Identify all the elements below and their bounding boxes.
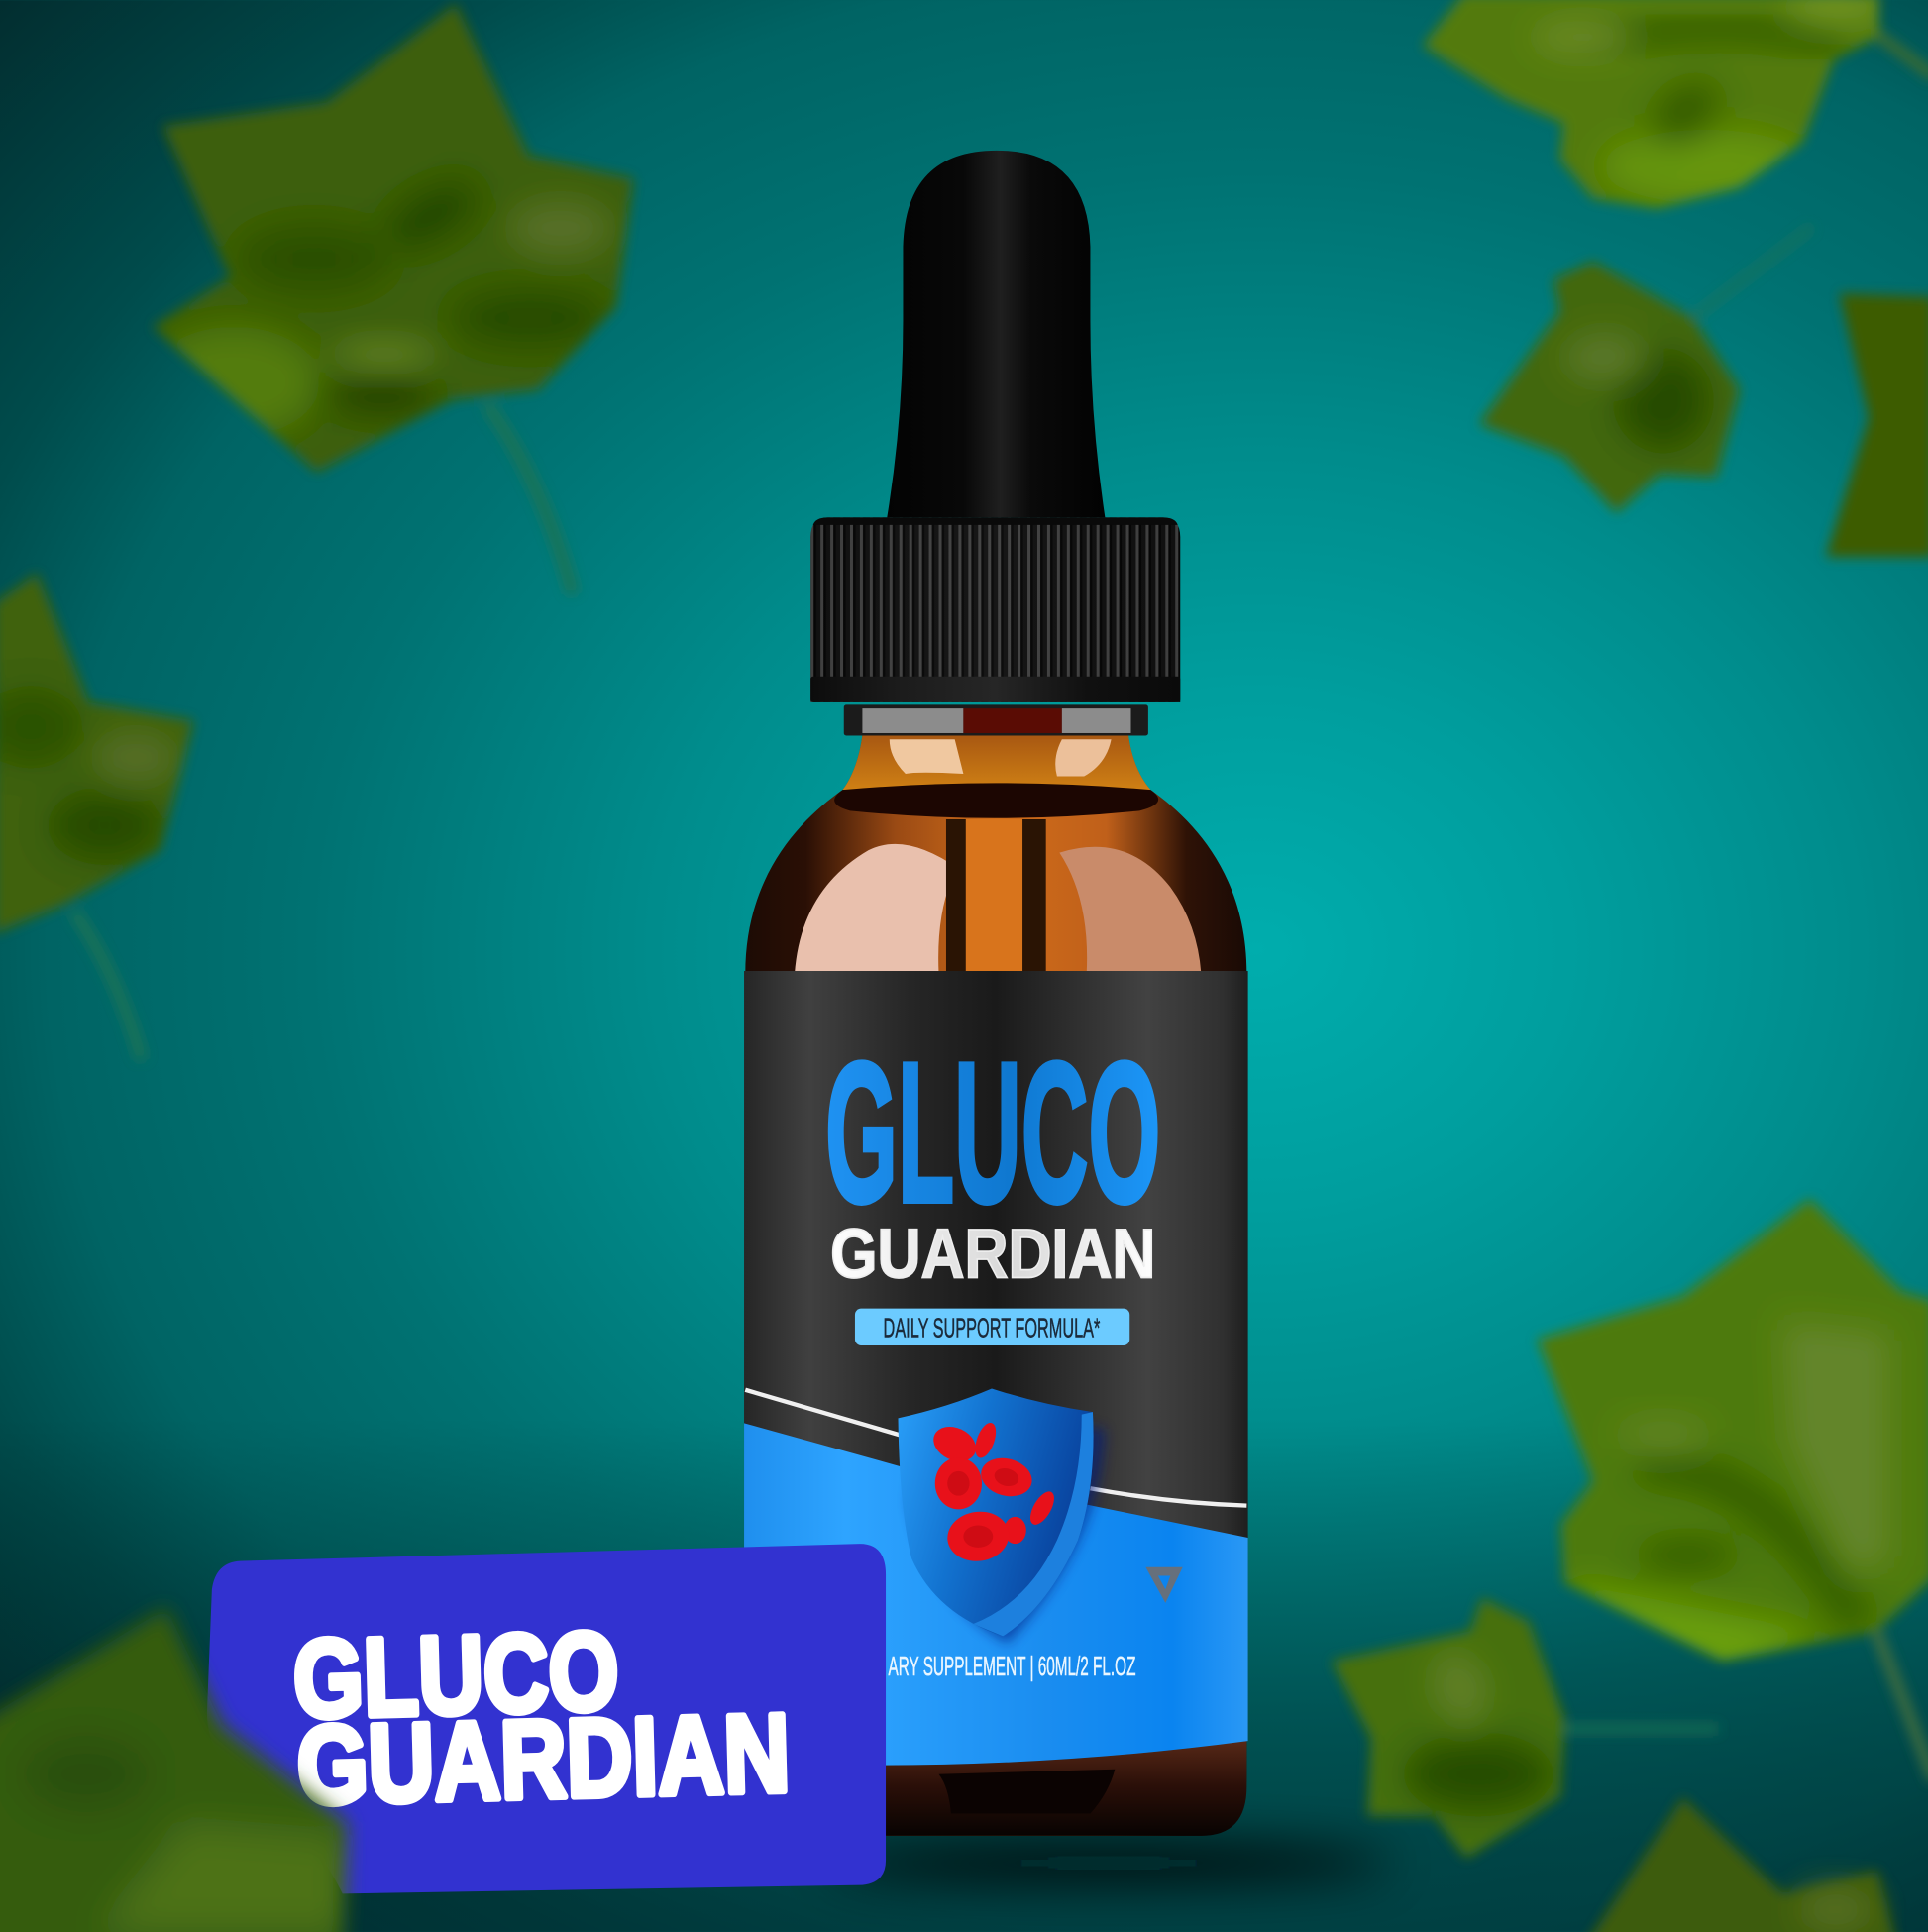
leaf: top right [1423,0,1928,208]
leaf: bottom right [1584,1797,1897,1932]
label title: guardian: GUARDIAN [830,1216,1155,1294]
leaf: lower right large [1538,1199,1928,1780]
card text: guardian: GUARDIAN [295,1691,792,1828]
card text: gluco: GLUCO [292,1609,620,1741]
brand mark [1145,1567,1183,1603]
product card [207,1544,886,1893]
leaf: top left [148,4,633,593]
ribbed cap [810,517,1180,702]
product label: GLUCO [825,1020,1160,1243]
shield icon with blood cells [898,1389,1105,1644]
red blood cells [928,1420,1059,1565]
dropper bulb [887,151,1105,517]
neck ring [844,704,1148,735]
leaf: upper right [1479,227,1812,512]
leaf: right edge [1826,293,1928,557]
product bottle [744,151,1248,1836]
tagline pill: DAILY SUPPORT FORMULA* [884,1312,1101,1342]
white line [745,1390,1246,1506]
size text: ARY SUPPLEMENT | 60ML/2 FL.OZ [889,1651,1135,1681]
bottle base shadow [939,1770,1115,1813]
leaf: lower middle right [1332,1598,1719,1858]
blue wave band [744,1423,1248,1766]
glass base [747,1737,1246,1836]
leaf: bottom left foreground [0,1608,348,1932]
tagline pill [855,1309,1129,1345]
leaf: middle left [0,573,193,1060]
glass body [745,735,1246,1836]
bottle shadow [825,1846,1392,1880]
product label [744,971,1248,1766]
